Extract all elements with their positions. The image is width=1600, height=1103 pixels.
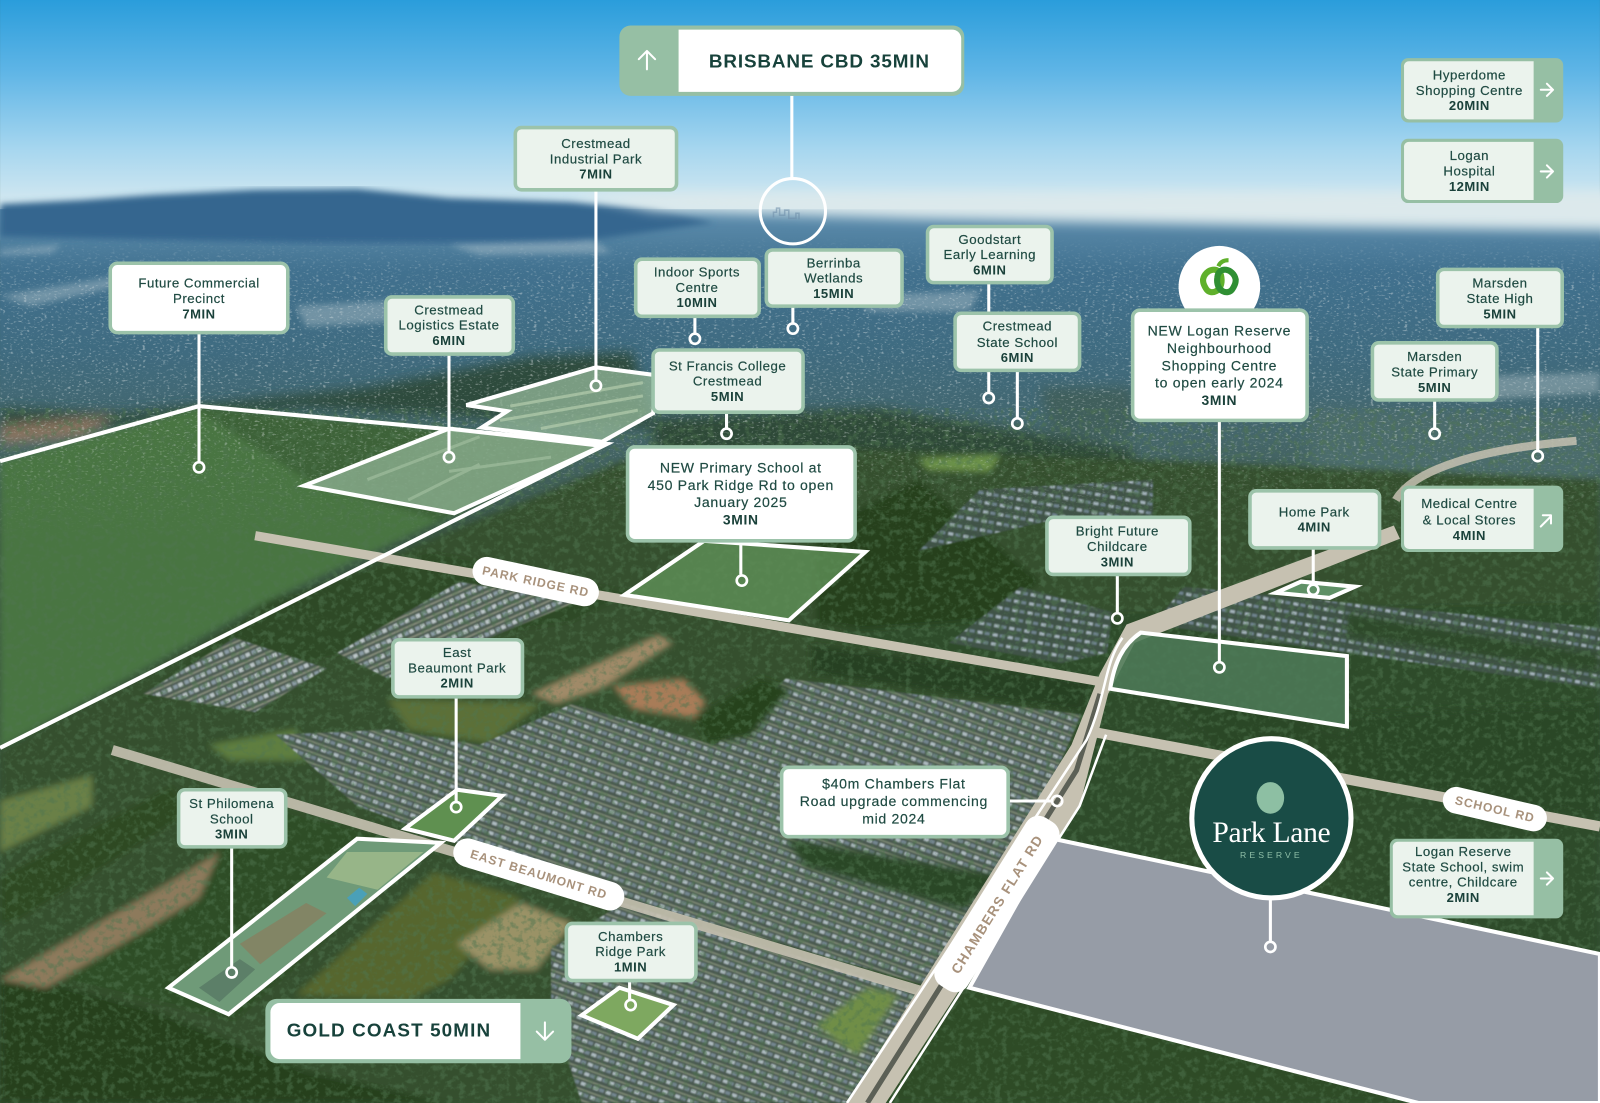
icon: tree leaf <box>1257 782 1284 814</box>
callout: Marsden State High: Marsden <box>1472 276 1528 291</box>
callout: St Philomena School: St Philomena <box>189 796 274 811</box>
callout: St Francis College Crestmead: 5MIN <box>711 389 744 404</box>
callout: St Philomena School: 3MIN <box>215 827 248 842</box>
callout: Crestmead State School: Crestmead <box>983 319 1052 334</box>
road: East Beaumont Rd <box>112 750 923 992</box>
callout: St Francis College Crestmead: St Francis College <box>669 358 786 373</box>
road label: Park Ridge Rd: PARK RIDGE RD <box>481 564 590 600</box>
callout: Medical Centre and Local Stores: Medical Centre <box>1421 496 1517 511</box>
icon: supermarket logo badge <box>1179 246 1260 328</box>
sky <box>0 0 1600 240</box>
callout: Goodstart Early Learning: 6MIN <box>973 262 1006 277</box>
callout: Crestmead Logistics Estate <box>386 297 513 462</box>
callout: Logan Hospital: Logan <box>1450 148 1489 163</box>
callout: Bright Future Childcare <box>1047 517 1190 623</box>
callout: Logan Reserve State School: State School, swim <box>1402 859 1524 874</box>
callout: Chambers Flat Road upgrade: Road upgrade commencing <box>800 793 988 809</box>
road: School Rd <box>1097 733 1600 826</box>
callout: Berrinba Wetlands: Berrinba <box>807 255 861 270</box>
distant mountains <box>0 189 714 243</box>
callout: Crestmead Industrial Park <box>515 128 677 391</box>
label: BRISBANE CBD 35MIN <box>709 50 930 71</box>
callout: NEW Primary School: 450 Park Ridge Rd to open <box>648 477 834 493</box>
callout: Goodstart Early Learning <box>928 227 1052 403</box>
callout: Chambers Flat Road upgrade: mid 2024 <box>862 810 925 826</box>
callout: Hyperdome Shopping Centre: 20MIN <box>1449 98 1490 113</box>
callout: Chambers Flat Road upgrade: $40m Chambers Flat <box>822 776 966 792</box>
callout: East Beaumont Park: East <box>443 645 471 660</box>
callout: Future Commercial Precinct: 7MIN <box>182 306 216 321</box>
road label: East Beaumont Rd <box>450 835 628 914</box>
callout: NEW Logan Reserve Neighbourhood Shopping Centre: Neighbourhood <box>1167 340 1272 356</box>
callout: Marsden State High <box>1438 269 1562 461</box>
callout: NEW Logan Reserve Neighbourhood Shopping Centre: 3MIN <box>1201 392 1237 408</box>
road label: Chambers Flat Rd <box>929 810 1065 998</box>
callout: Logan Hospital: 12MIN <box>1449 179 1490 194</box>
lot: Home Park <box>1275 582 1355 598</box>
callout: Home Park: 4MIN <box>1298 520 1331 535</box>
icon: up arrow <box>639 51 655 69</box>
callout: Crestmead Logistics Estate: Logistics Estate <box>399 318 499 333</box>
callout: Marsden State Primary: 5MIN <box>1418 380 1451 395</box>
callout: Medical Centre and Local Stores: 4MIN <box>1453 528 1486 543</box>
callout: St Philomena School: School <box>210 811 253 826</box>
callout: Crestmead Industrial Park: 7MIN <box>579 167 613 182</box>
road label: Chambers Flat Rd: CHAMBERS FLAT RD <box>948 832 1046 977</box>
pale suburb clusters <box>0 240 1600 400</box>
callout: Marsden State High: 5MIN <box>1483 306 1517 321</box>
lot: St Philomena School <box>168 839 441 1014</box>
callout: NEW Primary School: NEW Primary School at <box>660 459 822 475</box>
callout: Logan Reserve State School: centre, Childcare <box>1409 875 1518 890</box>
callout: Marsden State Primary <box>1372 343 1497 439</box>
callout: Chambers Flat Road upgrade <box>782 767 1062 837</box>
lot: Crestmead Logistics Estate <box>304 429 602 513</box>
callout: NEW Primary School: January 2025 <box>694 494 787 510</box>
road label: East Beaumont Rd: EAST BEAUMONT RD <box>469 847 609 902</box>
lot: Crestmead Industrial Park <box>466 367 658 442</box>
far suburbs speckle <box>0 235 1600 541</box>
callout: Marsden State High: State High <box>1466 291 1533 306</box>
lot: Chambers Ridge Park <box>582 988 673 1039</box>
callout: Indoor Sports Centre <box>636 259 759 344</box>
callout: Crestmead Logistics Estate: Crestmead <box>414 302 484 317</box>
lot: East Beaumont Park <box>405 790 502 841</box>
wordmark: Park Lane <box>1212 817 1331 849</box>
callout: NEW Primary School <box>628 447 855 586</box>
lot: primary school <box>624 541 865 620</box>
callout: East Beaumont Park: 2MIN <box>441 676 474 691</box>
lot: Park Lane Reserve site <box>969 839 1600 1103</box>
housing estates <box>143 480 1600 1103</box>
callout: Indoor Sports Centre: Indoor Sports <box>654 265 740 280</box>
lot: shopping centre <box>1110 633 1347 726</box>
callout: NEW Logan Reserve Neighbourhood Shopping Centre <box>1133 310 1307 672</box>
callout: Future Commercial Precinct: Future Commercial <box>138 276 260 291</box>
callout: Brisbane CBD 35MIN <box>619 26 964 179</box>
callout: Berrinba Wetlands: 15MIN <box>813 286 854 301</box>
callout: Marsden State Primary: Marsden <box>1407 349 1462 364</box>
road: Chambers Flat Rd <box>847 525 1400 1103</box>
callout: Bright Future Childcare: Bright Future <box>1076 524 1159 539</box>
callout: Gold Coast 50MIN: GOLD COAST 50MIN <box>287 1020 491 1041</box>
callout: Goodstart Early Learning: Early Learning <box>943 247 1036 262</box>
pin <box>1269 898 1272 942</box>
callout: Gold Coast 50MIN <box>265 999 571 1063</box>
skyline <box>773 208 799 219</box>
callout: East Beaumont Park <box>393 640 522 812</box>
road label: School Rd <box>1440 784 1550 834</box>
callout: NEW Logan Reserve Neighbourhood Shopping Centre: NEW Logan Reserve <box>1148 323 1291 339</box>
callout: Berrinba Wetlands: Wetlands <box>804 271 863 286</box>
callout: Home Park <box>1250 491 1380 595</box>
callout: Bright Future Childcare: 3MIN <box>1101 554 1134 569</box>
roads <box>112 441 1600 1103</box>
callout: Chambers Ridge Park: 1MIN <box>614 959 647 974</box>
road median <box>867 694 1100 1103</box>
outer tab <box>619 26 964 96</box>
callout: Berrinba Wetlands <box>766 250 902 334</box>
callout: Crestmead Logistics Estate: 6MIN <box>432 333 466 348</box>
subtitle: RESERVE <box>1240 850 1303 860</box>
callout: Hyperdome Shopping Centre: Shopping Centre <box>1416 83 1523 98</box>
callout: Crestmead State School: 6MIN <box>1001 350 1034 365</box>
callout: Hyperdome Shopping Centre <box>1401 58 1563 122</box>
road: Park Ridge Rd <box>255 536 1100 682</box>
callout: Bright Future Childcare: Childcare <box>1087 539 1148 554</box>
callout: Medical Centre and Local Stores <box>1401 486 1563 552</box>
callout: St Philomena School <box>179 790 286 977</box>
badge: Park Lane Reserve <box>1192 739 1351 952</box>
callout: NEW Primary School: 3MIN <box>723 511 759 527</box>
terrain regions <box>0 406 1600 1103</box>
callout: Indoor Sports Centre: Centre <box>676 280 718 295</box>
callout: Hyperdome Shopping Centre: Hyperdome <box>1433 68 1506 83</box>
callout: Chambers Ridge Park: Chambers <box>598 929 663 944</box>
callout: Crestmead State School <box>955 313 1080 429</box>
callout: Future Commercial Precinct <box>110 263 288 472</box>
CBD ring <box>760 179 826 244</box>
callout: Crestmead Industrial Park: Crestmead <box>561 136 631 151</box>
callout: NEW Logan Reserve Neighbourhood Shopping Centre: Shopping Centre <box>1162 357 1277 373</box>
ring <box>760 179 826 244</box>
callout: Marsden State Primary: State Primary <box>1391 365 1478 380</box>
white panel <box>679 30 961 92</box>
callout: St Francis College Crestmead: Crestmead <box>693 374 762 389</box>
road label: School Rd: SCHOOL RD <box>1454 793 1536 825</box>
lot: Future Commercial Precinct <box>0 406 607 748</box>
tree canopy texture <box>0 408 1600 1103</box>
callout: St Francis College Crestmead <box>653 350 803 439</box>
far terrain bands <box>0 352 1600 531</box>
road: upper curve <box>1396 441 1576 500</box>
callout: NEW Logan Reserve Neighbourhood Shopping Centre: to open early 2024 <box>1155 375 1284 391</box>
callout: Future Commercial Precinct: Precinct <box>173 291 225 306</box>
callout: Logan Reserve State School: Logan Reserve <box>1415 844 1511 859</box>
callout: Logan Reserve State School: 2MIN <box>1447 890 1480 905</box>
callout: Crestmead State School: State School <box>977 335 1058 350</box>
road label: Park Ridge Rd <box>470 554 602 609</box>
callout: Chambers Ridge Park <box>566 923 696 1010</box>
callout: Logan Hospital: Hospital <box>1443 164 1495 179</box>
callout: Goodstart Early Learning: Goodstart <box>958 232 1021 247</box>
callout: Chambers Ridge Park: Ridge Park <box>595 944 666 959</box>
horizon haze <box>571 192 1600 231</box>
road edge lines <box>847 638 1122 1103</box>
forest and cleared patches in estates <box>531 612 1600 1056</box>
callout: Indoor Sports Centre: 10MIN <box>676 295 717 310</box>
connector <box>790 96 793 179</box>
circle <box>1192 739 1351 898</box>
callout: Home Park: Home Park <box>1279 504 1350 519</box>
callout: East Beaumont Park: Beaumont Park <box>408 660 506 675</box>
callout: Medical Centre and Local Stores: & Local Stores <box>1423 512 1516 527</box>
callout: Logan Reserve State School <box>1390 839 1563 918</box>
callout: Logan Hospital <box>1401 139 1563 203</box>
buildings and pool <box>240 903 327 964</box>
callout: Crestmead Industrial Park: Industrial Park <box>550 151 642 166</box>
